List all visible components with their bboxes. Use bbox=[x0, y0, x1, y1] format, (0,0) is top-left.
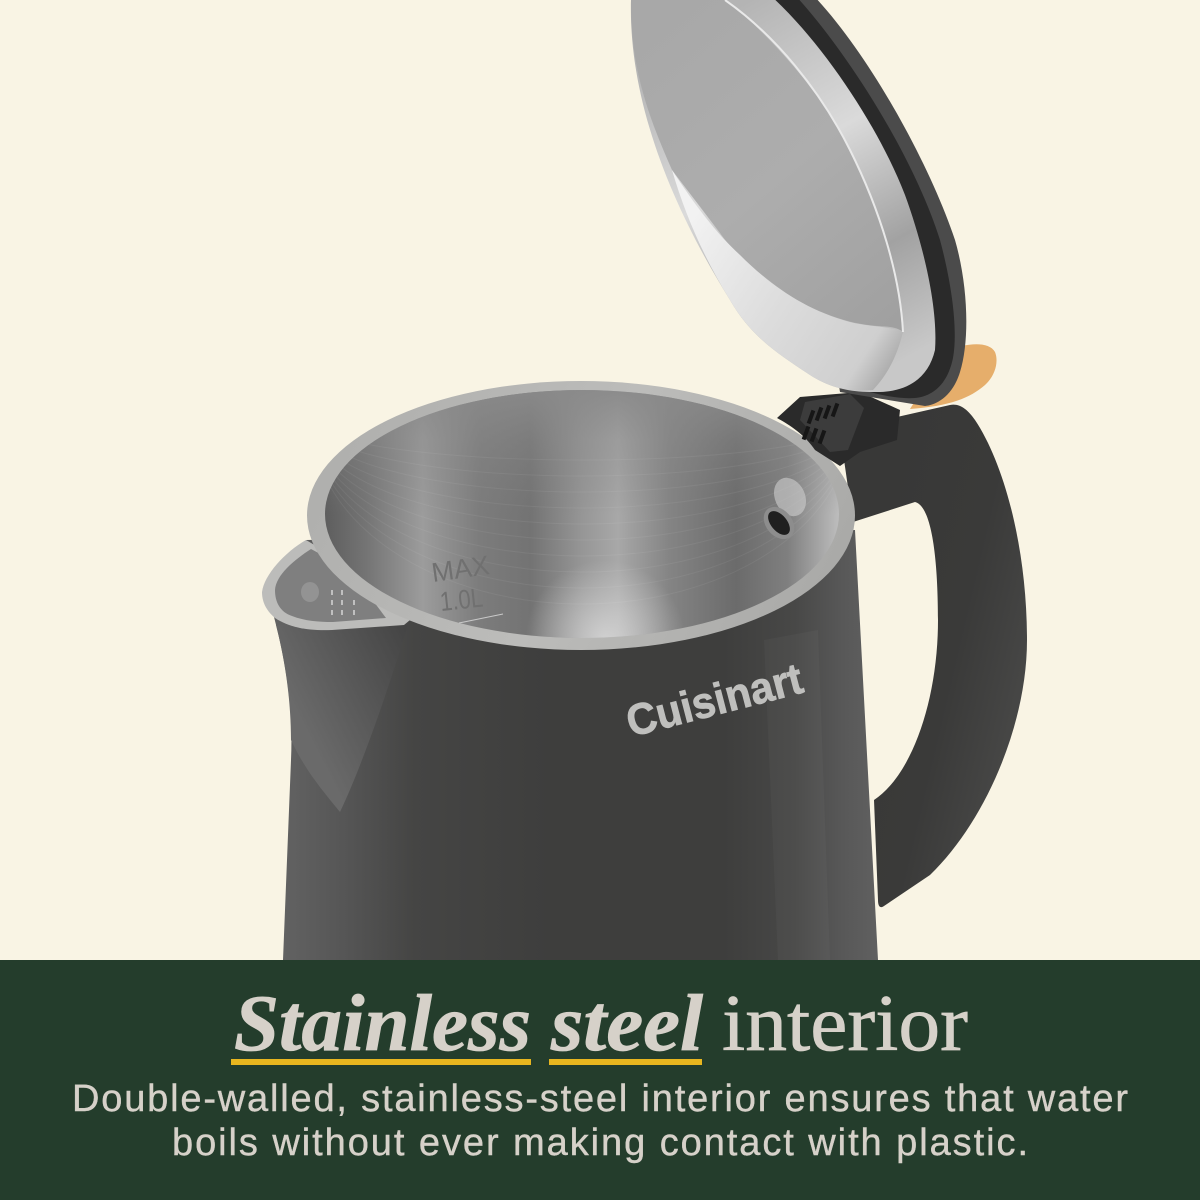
heading: interior bbox=[722, 980, 968, 1068]
open lid bbox=[631, 0, 966, 406]
handle bbox=[840, 405, 1027, 907]
heading underline: Stainless bbox=[231, 1059, 531, 1065]
pouring spout bbox=[262, 540, 410, 630]
description text: Double-walled, stainless-steel interior ensures that water bbox=[72, 1078, 1128, 1120]
stainless steel interior bbox=[325, 390, 839, 638]
steam vent hole bbox=[757, 473, 812, 545]
orange lid tab bbox=[910, 344, 997, 409]
capacity markings: MAX bbox=[430, 550, 491, 588]
kettle illustration bbox=[262, 0, 1027, 960]
caption panel bbox=[0, 960, 1200, 1200]
steel rim bbox=[307, 381, 855, 650]
heading underline: steel bbox=[549, 1059, 702, 1065]
heading: steel bbox=[550, 980, 704, 1068]
lid hinge bbox=[777, 392, 900, 466]
capacity markings bbox=[430, 550, 503, 623]
kettle body bbox=[274, 530, 878, 960]
Cuisinart logo: Cuisinart bbox=[621, 654, 808, 747]
heading: Stainless bbox=[234, 980, 531, 1068]
description text: boils without ever making contact with plastic. bbox=[172, 1122, 1028, 1164]
description text bbox=[72, 1078, 1128, 1164]
cream background bbox=[0, 0, 1200, 960]
capacity markings: 1.0L bbox=[438, 583, 484, 617]
